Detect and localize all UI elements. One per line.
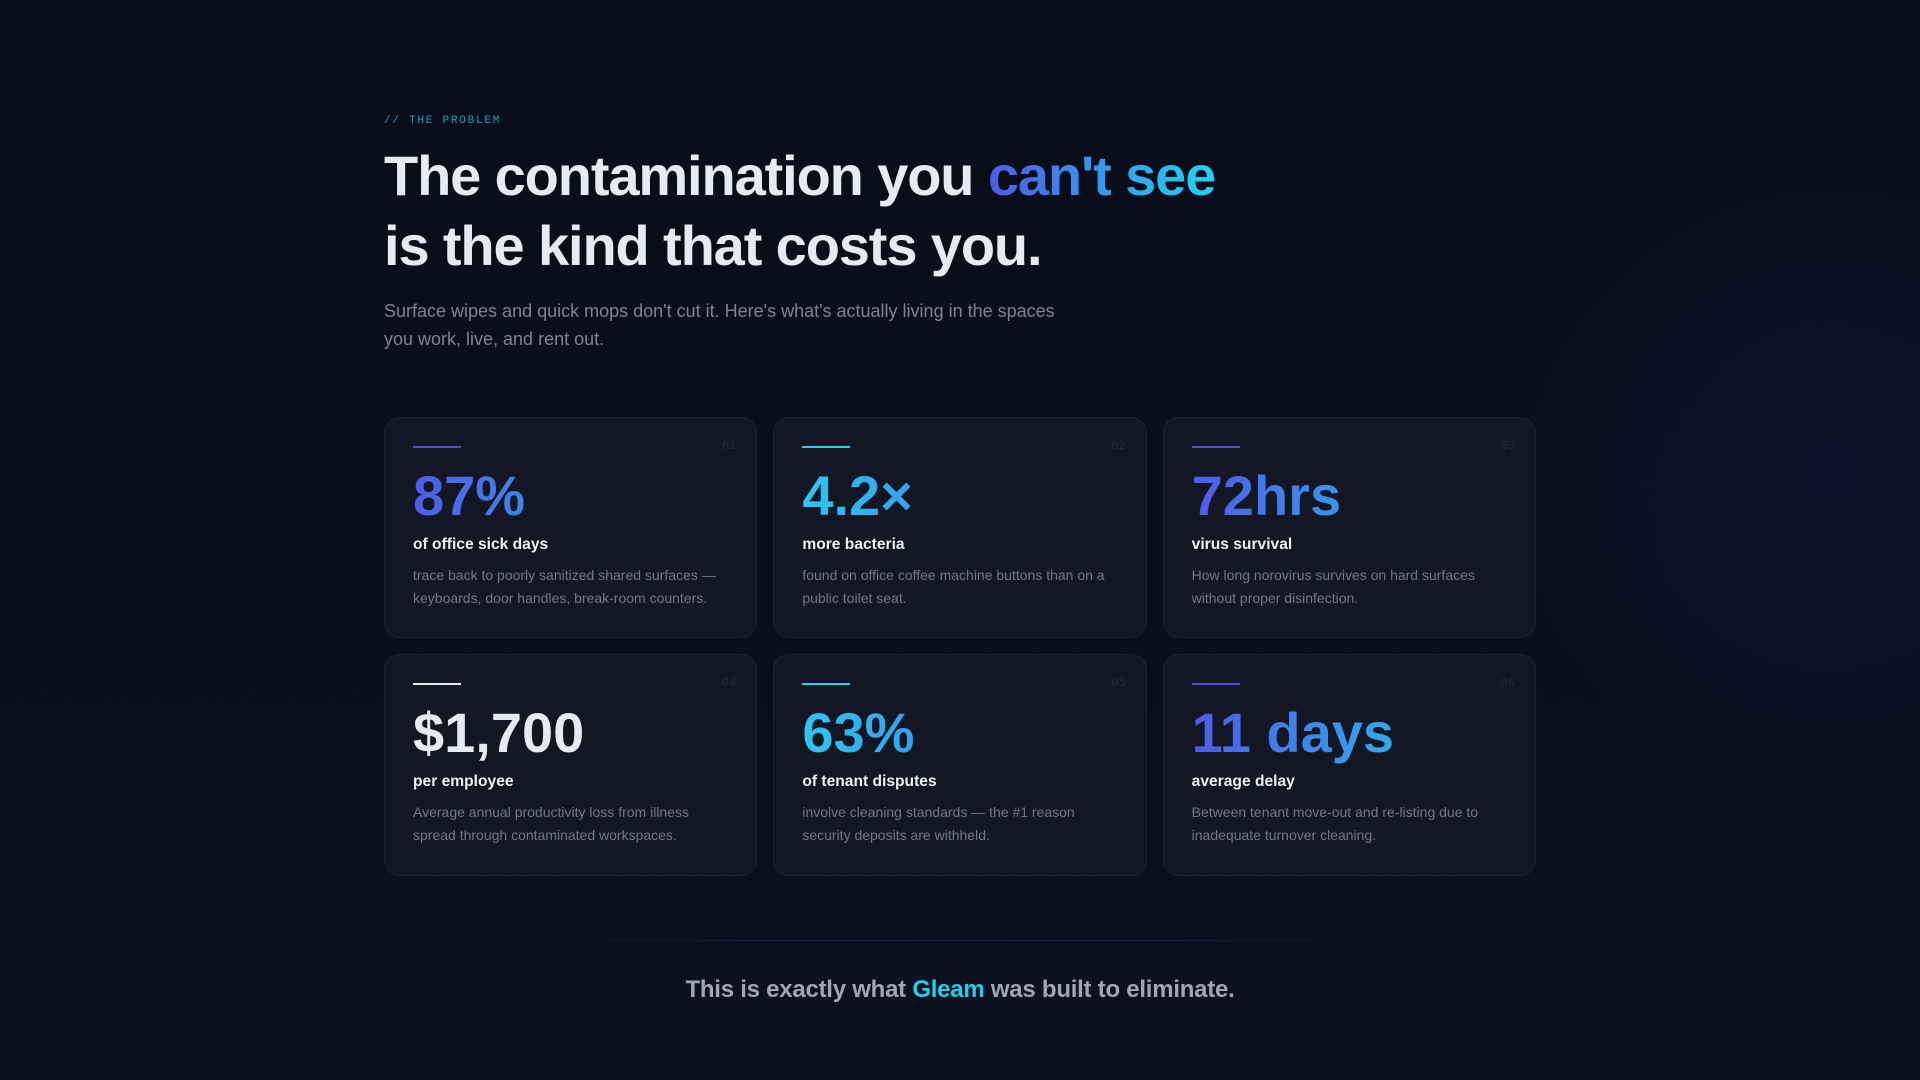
- stat: 87%: 87%: [413, 464, 525, 527]
- panel: stat card 04 productivity loss: [384, 654, 757, 876]
- stat: $1,700: [413, 701, 728, 765]
- stat description: without proper disinfection.: [1192, 590, 1358, 606]
- stat description: Average annual productivity loss from illness: [413, 804, 689, 820]
- panel: stat card 03 virus survival: 03: [1501, 439, 1515, 453]
- stat description: [1192, 804, 1478, 843]
- subtitle: you work, live, and rent out.: [384, 329, 604, 349]
- stat description: [802, 804, 1075, 843]
- panel: stat card 05 tenant disputes: [773, 654, 1147, 876]
- stat label: of tenant disputes: [802, 773, 937, 790]
- stat description: How long norovirus survives on hard surfaces: [1192, 567, 1475, 583]
- stat description: [413, 567, 716, 606]
- stat description: [802, 567, 1105, 606]
- stat label: per employee: [413, 773, 514, 790]
- stat description: trace back to poorly sanitized shared surfaces —: [413, 567, 716, 583]
- eyebrow label: // THE PROBLEM: [384, 115, 501, 127]
- stat: 87%: [413, 464, 728, 528]
- panel: stat card 01 office sick days: [384, 417, 757, 638]
- title: [384, 144, 1215, 277]
- panel: stat card 06 listing delay: [1163, 654, 1536, 876]
- stat: 4.2×: [802, 464, 1117, 528]
- stat description: keyboards, door handles, break-room counters.: [413, 590, 707, 606]
- closing statement: This is exactly what Gleam was built to eliminate.: [685, 976, 1234, 1003]
- stat description: involve cleaning standards — the #1 reason: [802, 804, 1075, 820]
- panel: stat card 05 tenant disputes: 05: [1111, 676, 1126, 690]
- stat: 72hrs: 72hrs: [1192, 464, 1341, 527]
- stat description: inadequate turnover cleaning.: [1192, 827, 1376, 843]
- subtitle: Surface wipes and quick mops don't cut it. Here's what's actually living in the spaces: [384, 301, 1055, 321]
- panel: stat card 02 bacteria: [773, 417, 1147, 638]
- title: is the kind that costs you.: [384, 214, 1041, 277]
- stat description: [413, 804, 689, 843]
- panel: stat card 06 listing delay: 06: [1501, 676, 1515, 690]
- stat description: security deposits are withheld.: [802, 827, 990, 843]
- panel: stat card 03 virus survival: [1163, 417, 1536, 638]
- stat: 11 days: 11 days: [1192, 701, 1394, 764]
- stat label: of office sick days: [413, 536, 548, 553]
- title: The contamination you can't see: [384, 144, 1215, 207]
- stat label: average delay: [1192, 773, 1295, 790]
- stat: 4.2×: 4.2×: [802, 464, 913, 527]
- stat: 63%: [802, 701, 1117, 765]
- stat: 11 days: [1192, 701, 1507, 765]
- stat label: more bacteria: [802, 536, 905, 553]
- subtitle: [384, 301, 1055, 349]
- stat description: public toilet seat.: [802, 590, 907, 606]
- panel: stat card 01 office sick days: 01: [722, 439, 736, 453]
- stat: $1,700: $1,700: [413, 701, 584, 764]
- stat description: [1192, 567, 1475, 606]
- stat description: Between tenant move-out and re-listing due to: [1192, 804, 1478, 820]
- stat description: spread through contaminated workspaces.: [413, 827, 677, 843]
- stat description: found on office coffee machine buttons than on a: [802, 567, 1105, 583]
- panel: stat card 02 bacteria: 02: [1111, 439, 1126, 453]
- panel: stat card 04 productivity loss: 04: [722, 676, 736, 690]
- stat label: virus survival: [1192, 536, 1292, 553]
- stat: 72hrs: [1192, 464, 1507, 528]
- stat: 63%: 63%: [802, 701, 914, 764]
